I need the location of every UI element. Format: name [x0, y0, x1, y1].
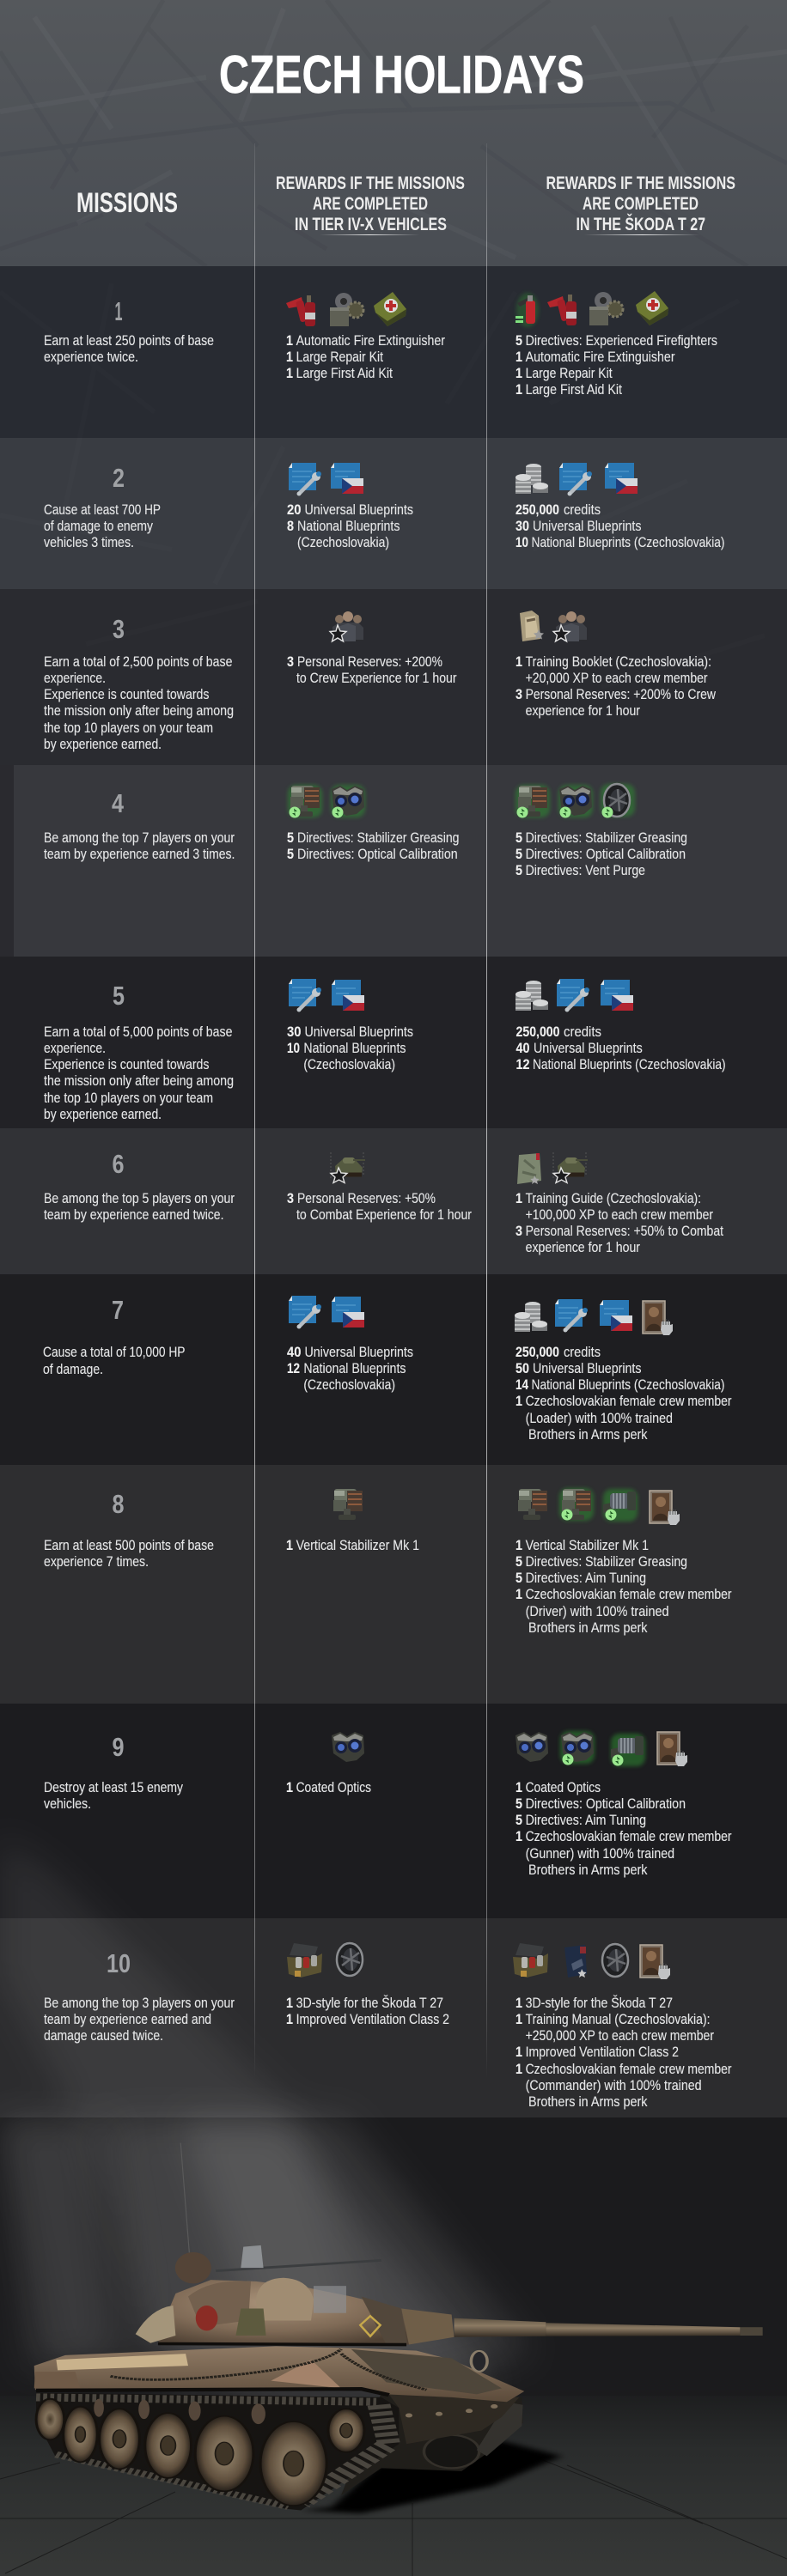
- rewards: mission 9 Škoda: (Gunner) with 100% trained: [526, 1845, 674, 1862]
- rope: [110, 2349, 426, 2390]
- icons: mission 5 standard rewards: [289, 979, 364, 1012]
- rewards: mission 9 Škoda: Directives: Aim Tuning: [526, 1812, 646, 1828]
- rewards: mission 6 standard: 3: [287, 1190, 294, 1206]
- mission 4 text: team by experience earned 3 times.: [44, 846, 235, 862]
- rewards: mission 5 standard: (Czechoslovakia): [303, 1056, 395, 1072]
- panel: mission 2: [44, 463, 725, 550]
- rewards: mission 2 Škoda: Universal Blueprints: [533, 518, 641, 534]
- mission 9 text: [44, 1779, 183, 1812]
- rewards: mission 1 Škoda: 1: [516, 365, 522, 381]
- rewards: mission 2 standard: 20: [287, 501, 301, 518]
- rewards: mission 8 Škoda: Directives: Stabilizer Greasing: [526, 1553, 687, 1570]
- rewards: mission 3 standard: Personal Reserves: +200%: [297, 653, 442, 670]
- panel: mission 7: [43, 1295, 732, 1443]
- row bands: [0, 266, 787, 2117]
- rewards: mission 5 Škoda: 250,000: [516, 1024, 560, 1040]
- mission 7 text: Cause a total of 10,000 HP: [43, 1344, 186, 1360]
- rewards: mission 1 Škoda: Large Repair Kit: [526, 365, 613, 381]
- mission number 1: 1: [115, 296, 122, 326]
- rewards: mission 4 standard: Directives: Stabilizer Greasing: [297, 829, 459, 846]
- panel: mission 6: [44, 1149, 723, 1255]
- rewards: mission 9 Škoda: Brothers in Arms perk: [528, 1862, 648, 1878]
- illustration: Škoda T 27 tank: [34, 2143, 763, 2513]
- column heading: rewards in tier IV-X vehicles: REWARDS IF THE MISSIONS: [276, 173, 465, 193]
- mission number 4: 4: [112, 788, 125, 818]
- rewards: mission 7 Škoda: National Blueprints (Czechoslovakia): [531, 1376, 725, 1393]
- rewards: mission 6 standard: Personal Reserves: +50%: [297, 1190, 436, 1206]
- rewards: mission 4 Škoda: Directives: Optical Calibration: [526, 846, 686, 862]
- mission 7 text: of damage.: [43, 1361, 103, 1377]
- rewards: mission 1 standard: 1: [286, 349, 293, 365]
- rewards: mission 9 Škoda: 1: [516, 1779, 522, 1795]
- icons: mission 2 Škoda rewards: [516, 463, 638, 496]
- stowed logs: [56, 2354, 188, 2370]
- icons: mission 10 Škoda rewards: [513, 1943, 670, 1979]
- rewards: mission 5 standard: Universal Blueprints: [304, 1024, 413, 1040]
- icons: mission 2 standard rewards: [289, 463, 363, 496]
- rewards: mission 8 Škoda: (Driver) with 100% trained: [526, 1603, 669, 1619]
- rewards: mission 1 Škoda: [516, 332, 717, 398]
- column rules: [254, 143, 487, 2078]
- rewards: mission 7 standard: Universal Blueprints: [304, 1344, 413, 1360]
- rewards: mission 8 Škoda: 1: [516, 1586, 522, 1602]
- mission 2 text: vehicles 3 times.: [44, 534, 134, 550]
- icon: mission 8 vertical stabilizer: [333, 1489, 363, 1520]
- icon: mission 9 coated optics: [332, 1732, 364, 1762]
- title: CZECH HOLIDAYS: [219, 46, 584, 105]
- rewards: mission 10 Škoda: 3D-style for the Škoda T 27: [526, 1995, 673, 2011]
- rewards: mission 3 Škoda: 1: [516, 653, 522, 670]
- mission number 10: 10: [107, 1948, 131, 1978]
- rewards: mission 9 Škoda: [516, 1779, 732, 1878]
- faint background texture over upper rows: [0, 283, 765, 687]
- rewards: mission 7 standard: National Blueprints: [303, 1360, 406, 1376]
- rewards: mission 10 standard: 1: [286, 2011, 293, 2027]
- rewards: mission 6 standard: to Combat Experience for 1 hour: [296, 1206, 472, 1223]
- rewards: mission 1 Škoda: 1: [516, 349, 522, 365]
- rewards: mission 9 Škoda: 5: [516, 1795, 522, 1812]
- rewards: mission 1 standard: Large First Aid Kit: [296, 365, 393, 381]
- rewards: mission 5 Škoda: 40: [516, 1040, 529, 1056]
- rewards: mission 6 Škoda: +100,000 XP to each crew member: [526, 1206, 713, 1223]
- column heading: rewards in tier IV-X vehicles: IN TIER IV-X VEHICLES: [295, 214, 447, 234]
- rewards: mission 1 standard: [286, 332, 445, 381]
- mission 3 text: Experience is counted towards: [44, 686, 210, 702]
- rewards: mission 7 standard: [287, 1344, 413, 1393]
- mission number 7: 7: [112, 1295, 124, 1325]
- panel: mission 1: [44, 291, 717, 398]
- rewards: mission 3 standard: [287, 653, 457, 686]
- rewards: mission 5 standard: 30: [287, 1024, 301, 1040]
- machine gun: [216, 2260, 381, 2271]
- light beams over lower rows and tank scene: [0, 1838, 533, 2404]
- panel: mission 4: [44, 784, 687, 878]
- rewards: mission 5 standard: National Blueprints: [303, 1040, 406, 1056]
- rewards: mission 1 standard: 1: [286, 365, 293, 381]
- column heading: rewards in tier IV-X vehicles: [276, 173, 465, 235]
- rewards: mission 10 standard: Improved Ventilation Class 2: [296, 2011, 449, 2027]
- rewards: mission 4 standard: Directives: Optical Calibration: [297, 846, 458, 862]
- mission number 2: 2: [113, 463, 125, 493]
- rewards: mission 8 Škoda: 1: [516, 1537, 522, 1553]
- icons: mission 5 Škoda rewards: [516, 979, 633, 1012]
- rewards: mission 7 Škoda: 50: [516, 1360, 529, 1376]
- rewards: mission 6 Škoda: [516, 1190, 723, 1255]
- icons: mission 3 Škoda rewards: [520, 611, 587, 641]
- mission 5 text: by experience earned.: [44, 1106, 162, 1122]
- turret stowage: [196, 2306, 217, 2330]
- rewards: mission 8 Škoda: [516, 1537, 732, 1636]
- rewards: mission 10 Škoda: Improved Ventilation Class 2: [526, 2044, 679, 2060]
- rewards: mission 6 Škoda: 1: [516, 1190, 522, 1206]
- rewards: mission 10 Škoda: 1: [516, 2011, 522, 2027]
- mission 2 text: of damage to enemy: [44, 518, 153, 534]
- icon: mission 6 combat reserve: [331, 1152, 365, 1183]
- rewards: mission 1 Škoda: 5: [516, 332, 522, 349]
- icons: mission 9 Škoda rewards: [516, 1731, 687, 1766]
- column heading: rewards in the Škoda T 27: IN THE ŠKODA T 27: [576, 213, 705, 234]
- panel: mission 5: [44, 979, 726, 1122]
- mission number 5: 5: [113, 981, 125, 1011]
- mission 9 text: vehicles.: [44, 1795, 91, 1812]
- rewards: mission 8 Škoda: Czechoslovakian female crew member: [526, 1586, 732, 1602]
- rewards: mission 1 Škoda: Directives: Experienced Firefighters: [526, 332, 717, 349]
- rewards: mission 7 Škoda: credits: [564, 1344, 601, 1360]
- rewards: mission 8 Škoda: Directives: Aim Tuning: [526, 1570, 646, 1586]
- rewards: mission 7 Škoda: Universal Blueprints: [533, 1360, 641, 1376]
- icons: mission 7 standard rewards: [289, 1296, 364, 1329]
- header panel: [0, 0, 787, 266]
- rewards: mission 6 Škoda: 3: [516, 1223, 522, 1239]
- mission 5 text: the top 10 players on your team: [44, 1090, 213, 1106]
- rewards: mission 4 Škoda: 5: [516, 846, 522, 862]
- gun barrel: [401, 2308, 763, 2345]
- icons: mission 6 Škoda rewards: [517, 1152, 588, 1184]
- rewards: mission 4 Škoda: [516, 829, 687, 878]
- rewards: mission 9 Škoda: Directives: Optical Calibration: [526, 1795, 686, 1812]
- rewards: mission 5 standard: [287, 1024, 413, 1072]
- mission 10 text: [44, 1995, 235, 2044]
- icons: mission 7 Škoda rewards: [515, 1299, 673, 1335]
- rewards: mission 3 Škoda: [516, 653, 717, 719]
- far track and hull underside: [341, 2393, 523, 2495]
- mission 5 text: Experience is counted towards: [44, 1056, 210, 1072]
- rewards: mission 9 Škoda: 1: [516, 1828, 522, 1844]
- rewards: mission 4 standard: 5: [287, 829, 294, 846]
- headlight: [471, 2351, 487, 2372]
- rewards: mission 8 standard: Vertical Stabilizer Mk 1: [296, 1537, 419, 1553]
- panel: mission 3: [44, 611, 717, 752]
- rewards: mission 5 Škoda: credits: [564, 1024, 601, 1040]
- rewards: mission 2 standard: National Blueprints: [297, 518, 400, 534]
- mission 9 text: Destroy at least 15 enemy: [44, 1779, 183, 1795]
- rewards: mission 1 Škoda: Large First Aid Kit: [526, 381, 622, 398]
- rewards: mission 10 Škoda: Training Manual (Czechoslovakia):: [526, 2011, 710, 2027]
- rewards: mission 9 Škoda: Czechoslovakian female crew member: [526, 1828, 732, 1844]
- rewards: mission 2 Škoda: 250,000: [516, 501, 559, 518]
- mission 6 text: Be among the top 5 players on your: [44, 1190, 235, 1206]
- rewards: mission 5 Škoda: National Blueprints (Czechoslovakia): [533, 1056, 726, 1072]
- mission 10 text: team by experience earned and: [44, 2011, 211, 2027]
- rewards: mission 4 Škoda: 5: [516, 862, 522, 878]
- mission 3 text: Earn a total of 2,500 points of base: [44, 653, 232, 670]
- rewards: mission 4 Škoda: 5: [516, 829, 522, 846]
- rewards: mission 3 Škoda: experience for 1 hour: [526, 702, 640, 719]
- mission 2 text: [44, 501, 161, 550]
- rewards: mission 3 Škoda: 3: [516, 686, 522, 702]
- mission 3 text: [44, 653, 234, 752]
- rewards: mission 1 standard: Automatic Fire Extinguisher: [296, 332, 445, 349]
- mission 4 text: [44, 829, 235, 862]
- rewards: mission 10 Škoda: [516, 1995, 732, 2110]
- rewards: mission 5 Škoda: Universal Blueprints: [534, 1040, 643, 1056]
- rewards: mission 3 standard: to Crew Experience for 1 hour: [296, 670, 457, 686]
- rewards: mission 7 Škoda: 14: [516, 1376, 528, 1393]
- rewards: mission 5 standard: 10: [287, 1040, 300, 1056]
- rewards: mission 8 Škoda: 5: [516, 1553, 522, 1570]
- rewards: mission 6 Škoda: Personal Reserves: +50% to Combat: [526, 1223, 723, 1239]
- rewards: mission 10 Škoda: 1: [516, 2061, 522, 2077]
- mission number 6: 6: [112, 1149, 124, 1179]
- mission 3 text: the top 10 players on your team: [44, 720, 213, 736]
- rewards: mission 10 Škoda: 1: [516, 1995, 522, 2011]
- mission 1 text: experience twice.: [44, 349, 138, 365]
- rewards: mission 10 Škoda: 1: [516, 2044, 522, 2060]
- icon: mission 3 crew reserve: [330, 611, 363, 641]
- mission 5 text: Earn a total of 5,000 points of base: [44, 1024, 232, 1040]
- rewards: mission 1 Škoda: Automatic Fire Extinguisher: [526, 349, 675, 365]
- rewards: mission 2 Škoda: 10: [516, 534, 528, 550]
- rewards: mission 2 standard: Universal Blueprints: [304, 501, 413, 518]
- rewards: mission 10 Škoda: +250,000 XP to each crew member: [526, 2027, 714, 2044]
- hull: [34, 2346, 524, 2402]
- mission number 8: 8: [112, 1489, 124, 1519]
- mission 5 text: experience.: [44, 1040, 106, 1056]
- mission 5 text: the mission only after being among: [44, 1072, 234, 1089]
- icons: mission 1 standard rewards: [286, 292, 406, 326]
- rewards: mission 8 standard: 1: [286, 1537, 293, 1553]
- tank shadow: [301, 2441, 562, 2513]
- rewards: mission 6 standard: [287, 1190, 472, 1223]
- mission 4 text: Be among the top 7 players on your: [44, 829, 235, 846]
- mission 6 text: team by experience earned twice.: [44, 1206, 223, 1223]
- road wheels: [36, 2399, 364, 2506]
- rewards: mission 2 standard: 8: [287, 518, 294, 534]
- rewards: mission 7 Škoda: Czechoslovakian female crew member: [526, 1393, 732, 1409]
- mission 6 text: [44, 1190, 235, 1223]
- rewards: mission 8 Škoda: Vertical Stabilizer Mk 1: [526, 1537, 649, 1553]
- rewards: mission 3 Škoda: Personal Reserves: +200% to Crew: [526, 686, 717, 702]
- rewards: mission 7 Škoda: Brothers in Arms perk: [528, 1426, 648, 1443]
- rewards: mission 7 standard: 40: [287, 1344, 301, 1360]
- column heading: rewards in the Škoda T 27: ARE COMPLETED: [583, 193, 699, 214]
- rewards: mission 1 standard: Large Repair Kit: [296, 349, 383, 365]
- mission 1 text: [44, 332, 214, 365]
- rewards: mission 10 standard: 3D-style for the Škoda T 27: [296, 1995, 443, 2011]
- rewards: mission 5 Škoda: [516, 1024, 726, 1072]
- rewards: mission 5 Škoda: 12: [516, 1056, 529, 1072]
- rewards: mission 10 standard: [286, 1995, 449, 2027]
- return rollers: [94, 2399, 265, 2424]
- rewards: mission 10 standard: 1: [286, 1995, 293, 2011]
- rewards: mission 1 standard: 1: [286, 332, 293, 349]
- mission 3 text: by experience earned.: [44, 736, 162, 752]
- rewards: mission 1 Škoda: 1: [516, 381, 522, 398]
- mission 2 text: Cause at least 700 HP: [44, 501, 161, 518]
- antenna: [180, 2143, 190, 2257]
- glacis lower: [389, 2394, 519, 2444]
- rewards: mission 7 Škoda: 1: [516, 1393, 522, 1409]
- rewards: mission 3 Škoda: Training Booklet (Czechoslovakia):: [526, 653, 711, 670]
- rewards: mission 7 Škoda: [516, 1344, 732, 1443]
- near track: [36, 2393, 399, 2510]
- rewards: mission 10 Škoda: Brothers in Arms perk: [528, 2093, 648, 2110]
- column heading: rewards in the Škoda T 27: [546, 173, 735, 235]
- rewards: mission 4 Škoda: Directives: Vent Purge: [526, 862, 645, 878]
- rewards: mission 4 standard: [287, 829, 459, 862]
- turret: [158, 2280, 409, 2346]
- mission 10 text: damage caused twice.: [44, 2027, 163, 2044]
- rewards: mission 9 standard: 1: [286, 1779, 293, 1795]
- rewards: mission 3 Škoda: +20,000 XP to each crew member: [526, 670, 708, 686]
- rewards: mission 7 Škoda: (Loader) with 100% trained: [526, 1410, 673, 1426]
- rewards: mission 8 Škoda: 5: [516, 1570, 522, 1586]
- rewards: mission 2 Škoda: credits: [564, 501, 601, 518]
- column heading: rewards in tier IV-X vehicles: ARE COMPLETED: [313, 193, 428, 214]
- mission 8 text: experience 7 times.: [44, 1553, 149, 1570]
- rewards: mission 6 Škoda: experience for 1 hour: [526, 1239, 640, 1255]
- rewards: mission 9 standard: Coated Optics: [296, 1779, 371, 1795]
- mission 1 text: Earn at least 250 points of base: [44, 332, 214, 349]
- rewards: mission 7 standard: (Czechoslovakia): [303, 1376, 395, 1393]
- rewards: mission 9 Škoda: 5: [516, 1812, 522, 1828]
- rewards: mission 4 Škoda: Directives: Stabilizer Greasing: [526, 829, 687, 846]
- icons: mission 1 Škoda rewards: [516, 291, 668, 327]
- mission 3 text: experience.: [44, 670, 106, 686]
- mission 7 text: [43, 1344, 186, 1377]
- panel: mission 10: [44, 1943, 732, 2110]
- mission 3 text: the mission only after being among: [44, 702, 234, 719]
- icons: mission 4 Škoda rewards: [516, 784, 635, 817]
- mission 8 text: Earn at least 500 points of base: [44, 1537, 214, 1553]
- rewards: mission 10 Škoda: Czechoslovakian female crew member: [526, 2061, 732, 2077]
- mission 10 text: Be among the top 3 players on your: [44, 1995, 235, 2011]
- rewards: mission 8 Škoda: Brothers in Arms perk: [528, 1619, 648, 1636]
- mission number 9: 9: [112, 1732, 124, 1762]
- icons: mission 4 standard rewards: [288, 785, 365, 817]
- scene: hangar floor and beams: [0, 2121, 787, 2576]
- column heading: missions: MISSIONS: [76, 187, 178, 218]
- icons: mission 8 Škoda rewards: [518, 1488, 680, 1525]
- rewards: mission 2 standard: (Czechoslovakia): [297, 534, 389, 550]
- panel: mission 9: [44, 1731, 732, 1878]
- rewards: mission 2 standard: [287, 501, 413, 550]
- rewards: mission 4 standard: 5: [287, 846, 294, 862]
- rewards: mission 3 standard: 3: [287, 653, 294, 670]
- rewards: mission 2 Škoda: [516, 501, 725, 550]
- rewards: mission 6 Škoda: Training Guide (Czechoslovakia):: [526, 1190, 701, 1206]
- rewards: mission 10 Škoda: (Commander) with 100% trained: [526, 2077, 702, 2093]
- rewards: mission 2 Škoda: 30: [516, 518, 529, 534]
- mission number 3: 3: [113, 614, 125, 644]
- rewards: mission 9 Škoda: Coated Optics: [526, 1779, 601, 1795]
- panel: mission 8: [44, 1488, 732, 1636]
- rewards: mission 7 Škoda: 250,000: [516, 1344, 559, 1360]
- mission 8 text: [44, 1537, 214, 1570]
- rewards: mission 2 Škoda: National Blueprints (Czechoslovakia): [531, 534, 725, 550]
- rewards: mission 7 standard: 12: [287, 1360, 300, 1376]
- mission 5 text: [44, 1024, 234, 1122]
- icons: mission 10 standard rewards: [287, 1943, 363, 1978]
